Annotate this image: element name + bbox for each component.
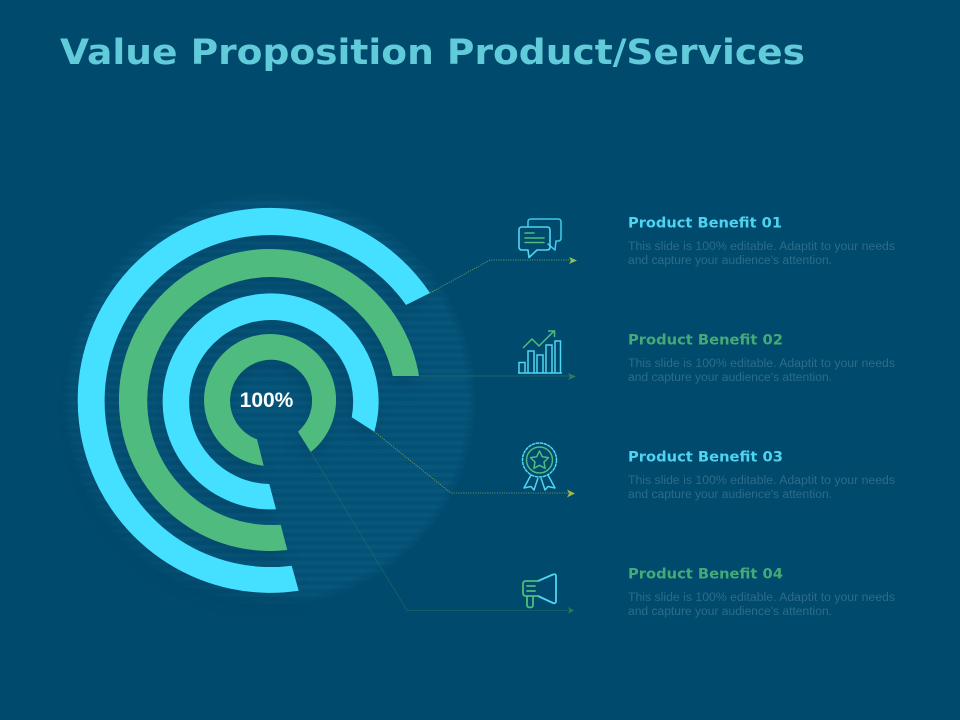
benefit 04 text block: This slide is 100% editable. Adaptit to your needs [628,592,895,604]
benefit 03 text block: This slide is 100% editable. Adaptit to your needs [628,475,895,487]
benefit 03 text block [628,450,895,501]
benefit 02 text block: Product Benefit 02 [628,332,783,348]
benefit 02 text block: This slide is 100% editable. Adaptit to your needs [628,358,895,370]
benefit 04 text block: Product Benefit 04 [628,566,783,582]
benefit 01 text block [628,216,895,267]
connector arrow 1 [430,257,577,293]
benefit 04 text block [628,566,895,618]
benefit 02 text block [628,332,895,384]
ring shadows [76,217,428,602]
benefit 01 text block: Product Benefit 01 [628,216,782,232]
ring 3: Product Benefit 03 [163,293,379,509]
title: Value Proposition Product/Services [60,33,805,73]
icon: megaphone [523,574,556,608]
connector arrow 4 [311,452,574,614]
icon: award ribbon [522,443,556,490]
benefit 01 text block: This slide is 100% editable. Adaptit to your needs [628,241,895,253]
striped background disc [64,194,476,606]
benefit 04 text block: and capture your audience's attention. [628,606,832,618]
benefit 01 text block: and capture your audience's attention. [628,255,832,267]
benefit 02 text block: and capture your audience's attention. [628,372,832,384]
connector arrow 3 [374,432,575,498]
icon: chat bubbles [519,219,561,258]
connector arrow 2 [419,373,576,380]
benefit 03 text block: Product Benefit 03 [628,450,783,466]
ring 4: Product Benefit 04 [204,334,336,466]
center value: 100% [240,389,294,412]
benefit 03 text block: and capture your audience's attention. [628,489,832,501]
concentric ring chart [78,208,430,593]
icon: bar chart with arrow [518,331,562,373]
ring 2: Product Benefit 02 [119,249,419,551]
ring 1: Product Benefit 01 [78,208,430,593]
